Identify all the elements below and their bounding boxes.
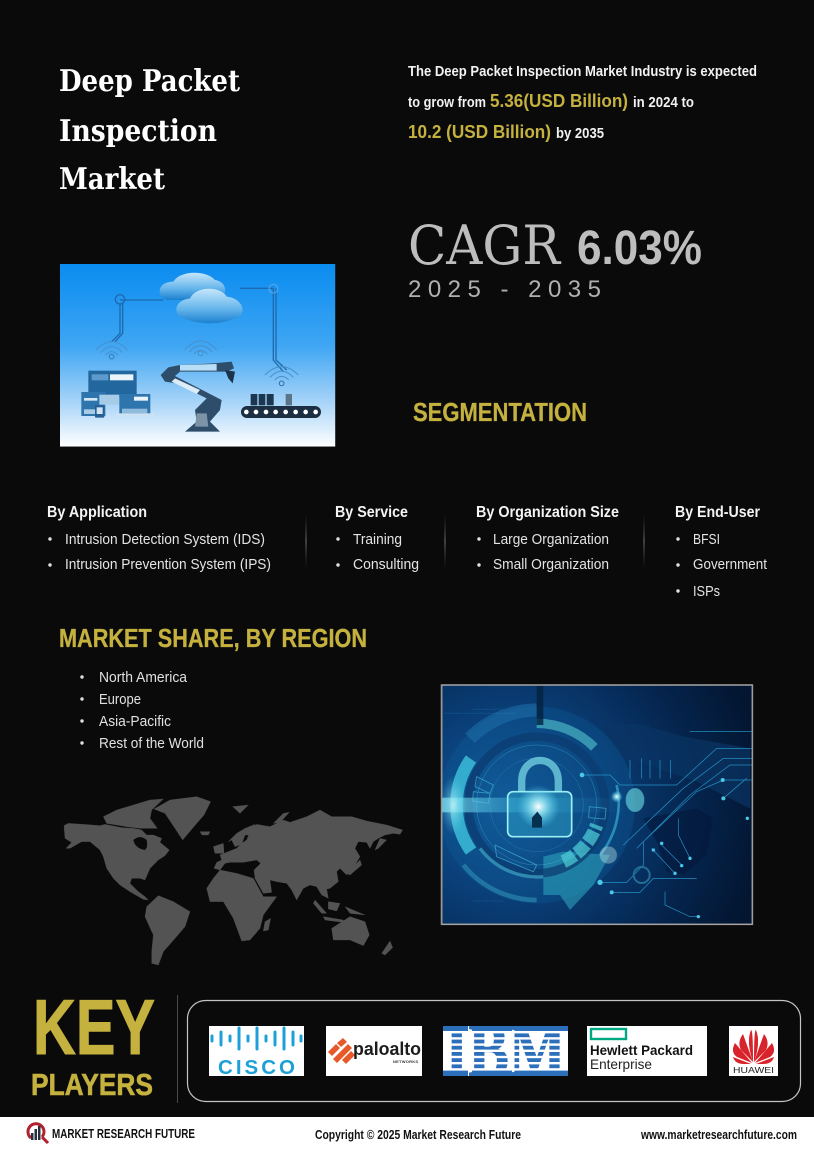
circuit traces: [445, 709, 752, 917]
key players panel: [188, 1000, 800, 1102]
market forecast summary: 5.36(USD Billion): [490, 90, 628, 111]
footer: [0, 1117, 814, 1150]
title: Market: [59, 162, 165, 197]
column: By Service: Training: [353, 532, 402, 548]
world map: [64, 797, 403, 965]
logo: Cisco: CISCO: [218, 1056, 295, 1079]
key players heading: PLAYERS: [31, 1067, 153, 1102]
column: By Service: [335, 504, 419, 573]
market forecast summary: 10.2 (USD Billion): [408, 121, 551, 142]
column: By End-User: [675, 504, 767, 600]
column: By Organization Size: [476, 504, 619, 573]
CAGR callout: CAGR: [408, 214, 561, 277]
key players heading: KEY: [33, 983, 155, 1071]
logo: Huawei: [729, 1026, 778, 1076]
column: By Organization Size: Small Organization: [493, 557, 609, 573]
title: Deep Packet: [59, 64, 240, 99]
clouds: [160, 273, 225, 300]
region list: Rest of the World: [99, 736, 204, 752]
image: digital padlock: [438, 685, 752, 924]
circuit lines: [112, 288, 287, 372]
logo: Palo Alto Networks: [326, 1026, 422, 1076]
column: By Application: Intrusion Detection System (IDS): [65, 532, 265, 548]
footer logo: [28, 1124, 48, 1143]
footer: Copyright © 2025 Market Research Future: [315, 1128, 521, 1142]
footer: MARKET RESEARCH FUTURE: [52, 1127, 195, 1141]
wifi symbols: [96, 341, 298, 380]
region list: North America: [99, 670, 188, 686]
market forecast summary: in 2024 to: [633, 95, 694, 111]
light band: [442, 798, 596, 812]
market forecast summary: by 2035: [556, 126, 604, 142]
column: By Organization Size: Large Organization: [493, 532, 609, 548]
region list: Asia-Pacific: [99, 714, 171, 730]
region list: Europe: [99, 692, 141, 708]
column: By End-User: Government: [693, 557, 767, 573]
column: By Service: Consulting: [353, 557, 419, 573]
column: By Application: By Application: [47, 504, 147, 521]
logo: IBM: IBM: [445, 1009, 566, 1093]
column: By Service: By Service: [335, 504, 408, 521]
logo: Palo Alto Networks: NETWORKS: [393, 1059, 418, 1064]
logo: Cisco: [209, 1026, 304, 1079]
market forecast summary: The Deep Packet Inspection Market Industry is expected: [408, 64, 757, 80]
key players heading: [31, 983, 155, 1102]
title: Inspection: [59, 114, 217, 149]
logo: Hewlett Packard Enterprise: Hewlett Packard: [590, 1042, 693, 1058]
market share heading: MARKET SHARE, BY REGION: [59, 625, 367, 653]
segmentation heading: SEGMENTATION: [413, 397, 587, 427]
CAGR callout: 6.03%: [577, 222, 702, 275]
CAGR callout: 2025 - 2035: [408, 276, 601, 303]
column: By End-User: ISPs: [693, 584, 720, 600]
logo: Palo Alto Networks: paloalto: [353, 1039, 421, 1059]
image: connected devices and cloud: [60, 264, 335, 447]
devices: [88, 371, 137, 397]
rings: [456, 710, 619, 900]
conveyor: [251, 394, 257, 405]
column: By Organization Size: By Organization Size: [476, 504, 619, 521]
logo: Hewlett Packard Enterprise: Enterprise: [590, 1056, 652, 1072]
logo: Huawei: HUAWEI: [733, 1065, 774, 1075]
logo: IBM: [443, 1026, 568, 1076]
logo: Hewlett Packard Enterprise: [587, 1026, 707, 1076]
robot arm: [161, 362, 234, 432]
region list: [80, 670, 204, 752]
padlock: [522, 760, 558, 792]
column: By End-User: BFSI: [693, 532, 720, 548]
column: By End-User: By End-User: [675, 504, 760, 521]
continents: [652, 728, 750, 808]
market forecast summary: to grow from: [408, 95, 486, 111]
CAGR callout: [408, 214, 702, 303]
column: By Application: Intrusion Prevention System (IPS): [65, 557, 271, 573]
column: By Application: [47, 504, 271, 573]
title: [59, 64, 240, 197]
market forecast summary: [408, 64, 757, 142]
